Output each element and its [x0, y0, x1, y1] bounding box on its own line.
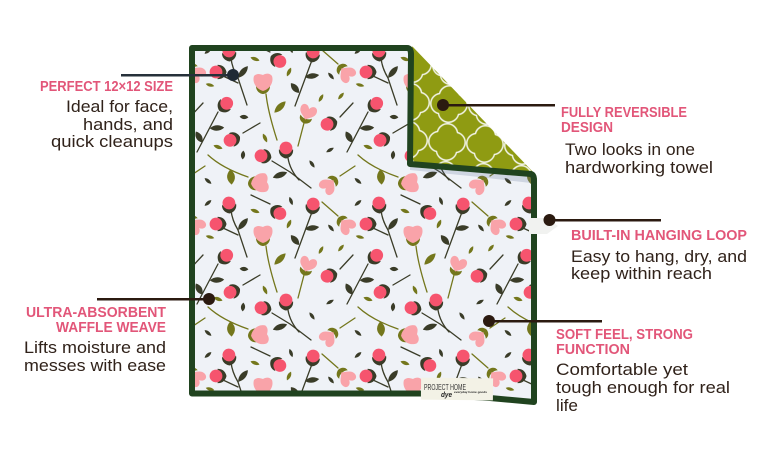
pointer line and dot — [121, 69, 239, 81]
callout: fully reversible design — [437, 99, 713, 177]
brand tag: everyday home goods — [454, 390, 487, 394]
pointer line and dot — [437, 99, 555, 111]
callout: perfect 12x12 size: PERFECT 12×12 SIZE — [40, 79, 173, 95]
callout: soft feel, strong function — [483, 315, 730, 415]
callout: built-in hanging loop: keep within reach — [571, 265, 712, 283]
callout: fully reversible design: Two looks in one — [565, 141, 695, 159]
towel fabric — [192, 48, 534, 402]
callout: fully reversible design: FULLY REVERSIBLE — [561, 105, 687, 121]
pointer line and dot — [97, 293, 215, 305]
brand tag: PROJECT HOME — [424, 383, 466, 392]
callout: perfect 12x12 size — [40, 69, 239, 151]
callout: ultra-absorbent waffle weave: messes with ease — [24, 357, 166, 375]
towel — [189, 45, 558, 405]
callout: fully reversible design: DESIGN — [561, 120, 613, 136]
callout: built-in hanging loop: Easy to hang, dry, and — [571, 248, 747, 266]
callout: ultra-absorbent waffle weave: ULTRA-ABSORBENT — [26, 305, 166, 321]
hanging loop — [529, 218, 558, 234]
callout: soft feel, strong function: tough enough for real — [556, 379, 730, 397]
callout: ultra-absorbent waffle weave — [24, 293, 215, 375]
pointer line and dot — [483, 315, 602, 327]
callout: soft feel, strong function: life — [556, 397, 578, 415]
callout: ultra-absorbent waffle weave: WAFFLE WEAVE — [56, 320, 166, 336]
brand tag: dye — [441, 392, 452, 399]
green stitched border — [192, 48, 534, 402]
folded corner: reverse side trellis — [410, 46, 535, 174]
callout: fully reversible design: hardworking towel — [565, 159, 713, 177]
callout: perfect 12x12 size: hands, and — [83, 116, 173, 134]
pointer line and dot — [544, 214, 661, 226]
callout: soft feel, strong function: SOFT FEEL, STRONG — [556, 327, 693, 343]
callout: ultra-absorbent waffle weave: Lifts moisture and — [24, 339, 166, 357]
callout: built-in hanging loop: BUILT-IN HANGING LOOP — [571, 228, 747, 244]
callout: built-in hanging loop — [544, 214, 747, 283]
callout: perfect 12x12 size: quick cleanups — [51, 133, 173, 151]
callout: soft feel, strong function: FUNCTION — [556, 342, 630, 358]
callout: perfect 12x12 size: Ideal for face, — [66, 98, 173, 116]
callout: soft feel, strong function: Comfortable yet — [556, 361, 688, 379]
floral pattern — [195, 51, 531, 391]
brand tag — [421, 378, 493, 400]
